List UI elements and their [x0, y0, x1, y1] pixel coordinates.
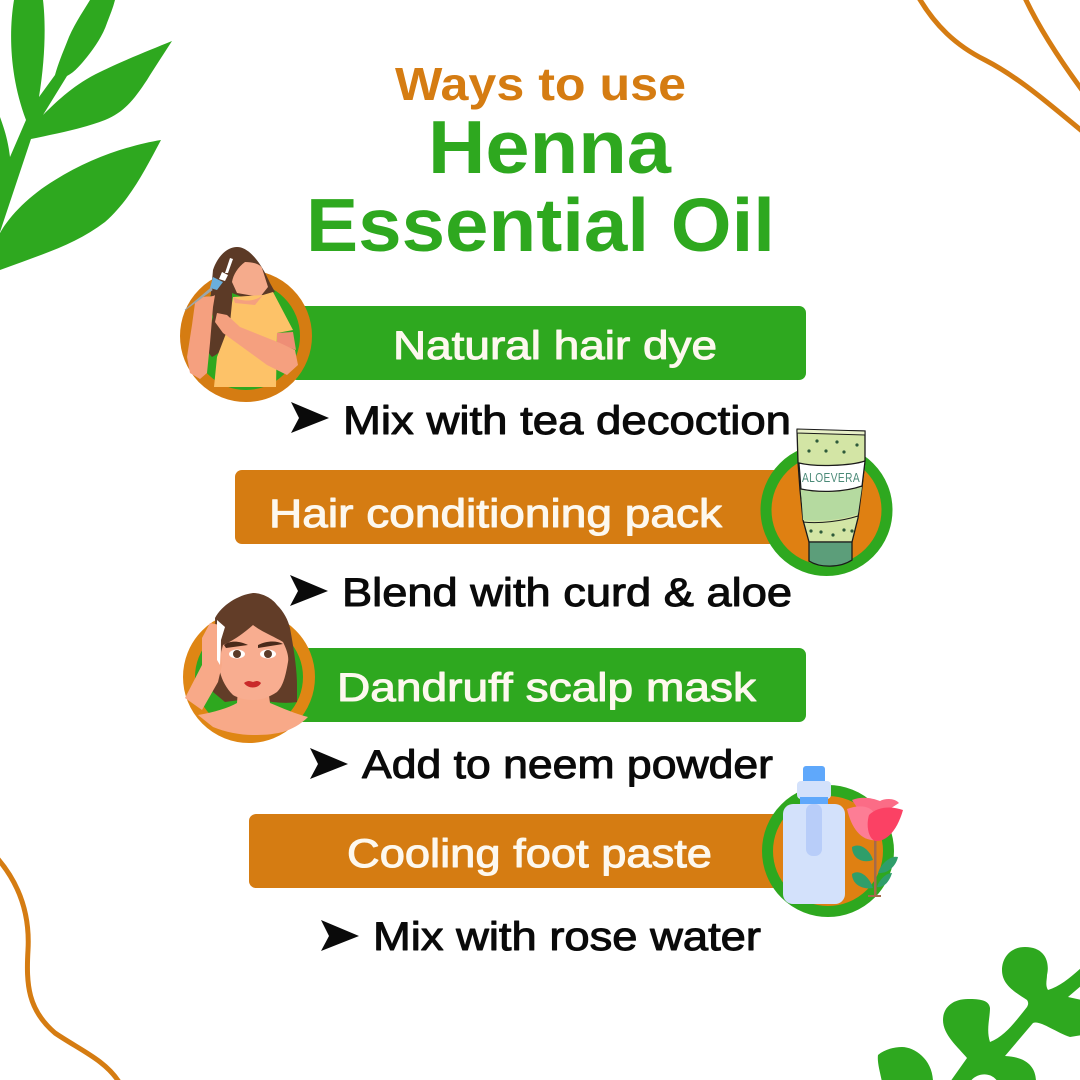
decoration: bottom-right green sprig — [878, 947, 1080, 1080]
icon: woman applying scalp mask — [185, 593, 309, 737]
title line: Ways to use: Ways to use — [395, 58, 686, 110]
step text 4: Mix with rose water — [373, 915, 761, 959]
arrow — [321, 920, 359, 951]
decoration: top-left leaf branch — [0, 0, 172, 270]
title — [306, 58, 775, 267]
banner 2: Hair conditioning pack: Hair conditioning pack — [269, 492, 723, 536]
icon: aloe vera tube — [766, 429, 887, 570]
banner 4: Cooling foot paste — [249, 814, 785, 888]
banner 3: Dandruff scalp mask: Dandruff scalp mask — [337, 666, 757, 710]
banner 2: Hair conditioning pack — [235, 470, 785, 544]
banner 1: Natural hair dye: Natural hair dye — [393, 324, 717, 368]
banner 3: Dandruff scalp mask — [295, 648, 806, 722]
arrow — [310, 748, 348, 779]
icon: woman brushing henna on hair — [185, 247, 306, 396]
tube label: ALOEVERA — [802, 470, 860, 485]
step text 1: Mix with tea decoction — [343, 399, 791, 443]
step text 2: Blend with curd & aloe — [342, 571, 792, 615]
arrow — [290, 575, 328, 606]
step text 3: Add to neem powder — [362, 743, 773, 787]
title line: Essential Oil: Essential Oil — [306, 183, 775, 267]
rose — [847, 798, 903, 897]
decoration: bottom-left orange curve — [0, 859, 119, 1080]
banner 1: Natural hair dye — [290, 306, 806, 380]
bottle — [783, 766, 845, 904]
decoration: top-right orange curves — [919, 0, 1080, 131]
icon: bottle and rose — [768, 766, 903, 912]
banner 4: Cooling foot paste: Cooling foot paste — [347, 832, 712, 876]
title line: Henna: Henna — [428, 105, 672, 189]
arrow — [291, 402, 329, 433]
